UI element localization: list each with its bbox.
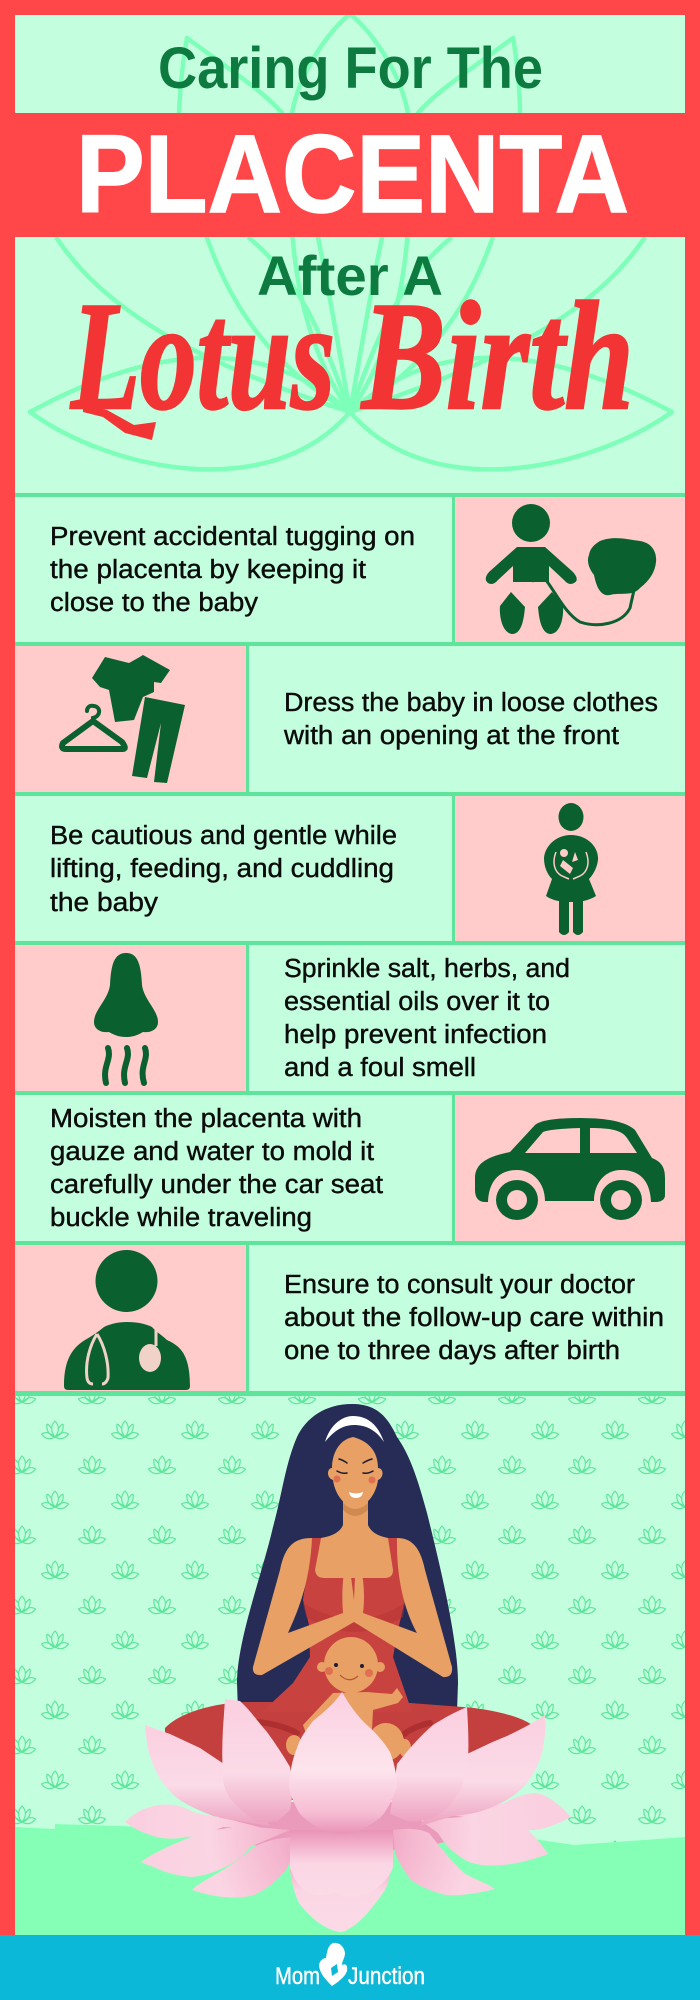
text: row 5 (50, 1105, 383, 1232)
bottom petal (290, 1850, 393, 1932)
icon: baby with placenta (486, 504, 656, 634)
text: row 4: essential oils over it to (284, 988, 550, 1016)
text: row 1: the placenta by keeping it (50, 556, 366, 584)
text: row 6: Ensure to consult your doctor (284, 1271, 636, 1299)
icon: doctor with stethoscope (64, 1250, 190, 1390)
logo: MomJunction: Mom (275, 1963, 320, 1990)
water ground (15, 1824, 685, 1935)
text: row 1 (50, 523, 415, 617)
logo: MomJunction: Junction (348, 1963, 425, 1990)
icon: mother holding baby (544, 803, 598, 935)
patterned lotus background (15, 1396, 685, 1935)
text: row 4: Sprinkle salt, herbs, and (284, 955, 570, 983)
text: row 1: Prevent accidental tugging on (50, 523, 415, 551)
header panel with lotus outline (15, 14, 685, 495)
text: row 3 (50, 822, 397, 917)
footer bar (0, 1935, 700, 2000)
heading: Lotus Birth (70, 270, 634, 442)
text: row 6: one to three days after birth (284, 1337, 620, 1365)
dress (262, 1538, 412, 1712)
text: row 2: Dress the baby in loose clothes (284, 689, 658, 717)
text: row 3: the baby (50, 889, 158, 917)
inner upper petals (222, 1699, 292, 1822)
text: row 4 (284, 955, 570, 1082)
row panels (15, 493, 685, 1396)
logo: MomJunction (275, 1943, 425, 1990)
left arm (253, 1538, 354, 1675)
text: row 1: close to the baby (50, 589, 258, 617)
text: row 5: Moisten the placenta with (50, 1105, 362, 1133)
text: row 2 (283, 689, 658, 750)
icon: clothes and hanger (62, 655, 185, 783)
text: row 6: about the follow-up care within (284, 1304, 664, 1332)
text: row 6 (284, 1271, 664, 1365)
right arm (354, 1538, 452, 1677)
icon: nose and smell waves (94, 953, 158, 1083)
text: row 5: buckle while traveling (50, 1204, 312, 1232)
centre petal (289, 1692, 397, 1834)
lotus outline watermark (30, 14, 672, 469)
neck and chest (315, 1500, 393, 1578)
icon: car (475, 1118, 665, 1220)
baby (286, 1637, 411, 1761)
heading: After A: After A (257, 244, 443, 307)
heading: Lotus Birth: Birth (360, 270, 634, 442)
text: row 3: lifting, feeding, and cuddling (50, 855, 394, 883)
text: row 4: help prevent infection (284, 1021, 547, 1049)
text: row 5: carefully under the car seat (50, 1171, 383, 1199)
heading: Lotus Birth: Lotus (70, 270, 335, 442)
banner: PLACENTA: PLACENTA (76, 113, 629, 236)
text: row 2: with an opening at the front (283, 722, 619, 750)
hair (237, 1404, 458, 1712)
headband (325, 1416, 384, 1442)
center lower petal (290, 1830, 393, 1896)
lower petals (125, 1804, 270, 1839)
heading: Caring For The: Caring For The (158, 36, 543, 101)
text: row 3: Be cautious and gentle while (50, 822, 397, 850)
text: row 4: and a foul smell (284, 1054, 476, 1082)
outer upper petals (145, 1725, 270, 1826)
face (328, 1437, 382, 1507)
flower heart filler (212, 1800, 472, 1852)
illustration: pink lotus flower (125, 1692, 571, 1932)
illustration: mother and baby on lotus (165, 1404, 532, 1800)
legs (165, 1702, 532, 1800)
text: row 5: gauze and water to mold it (50, 1138, 374, 1166)
